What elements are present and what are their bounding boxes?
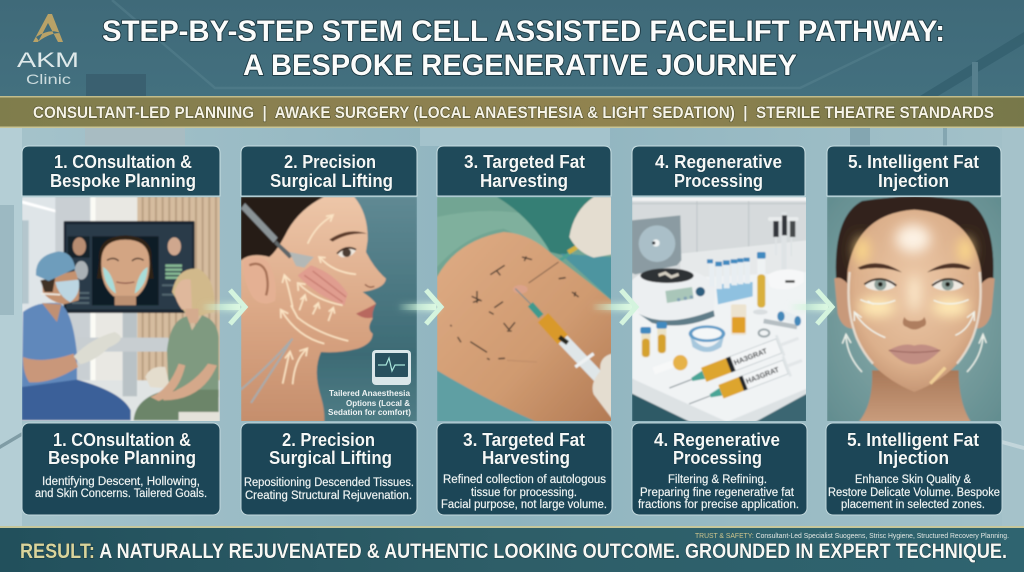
surgeon — [22, 303, 77, 388]
panel 2 text card: Creating Structural Rejuvenation. — [245, 490, 412, 502]
beaker — [731, 304, 746, 335]
panel 5: fat injection — [826, 146, 1002, 515]
features — [858, 263, 971, 272]
panel 4 heading: 4. Regenerative — [655, 151, 782, 172]
panel 3 text card: 3. Targeted Fat — [463, 429, 585, 450]
panel 1 heading: Bespoke Planning — [50, 170, 196, 191]
panel 5 heading — [827, 146, 1001, 196]
title: STEP-BY-STEP STEM CELL ASSISTED FACELIFT PATHWAY: — [102, 15, 945, 48]
panel 5 heading: Injection — [878, 170, 949, 191]
wall monitor — [64, 221, 195, 313]
stand and desk — [123, 313, 137, 396]
panel 4 heading: Processing — [674, 170, 763, 191]
small vial — [654, 364, 674, 371]
logo: AKM Clinic — [17, 14, 79, 87]
panel 2 heading: Surgical Lifting — [270, 170, 393, 191]
panel 1 text card: Identifying Descent, Hollowing, — [42, 476, 200, 488]
panel 1 text card: 1. COnsultation & — [53, 429, 191, 450]
panel 1 heading — [22, 146, 220, 196]
panel 2 heading: 2. Precision — [284, 151, 376, 172]
upper hand — [559, 252, 570, 261]
arrow: step 3 to 4 — [590, 290, 636, 324]
syringes: HA3GRAT — [732, 346, 769, 367]
panel 2 text card: Surgical Lifting — [269, 447, 392, 468]
arrow: step 1 to 2 — [200, 290, 245, 324]
arrow: step 2 to 3 — [396, 290, 441, 324]
panel 2 heading — [241, 146, 417, 196]
panel 3 image: thigh, markings and syringe — [437, 197, 612, 422]
small tubes — [641, 330, 650, 358]
panel 1 text card: Bespoke Planning — [48, 447, 196, 468]
panel 3 heading: 3. Targeted Fat — [464, 151, 585, 172]
panel 4 text card: Filtering & Refining. — [668, 474, 767, 486]
lower hand — [593, 354, 612, 419]
title — [102, 15, 945, 82]
panel 2 text card: 2. Precision — [282, 429, 375, 450]
panel 5 text card: Restore Delicate Volume. Bespoke — [828, 487, 1000, 499]
panel 2 image: face profile with lift arrows — [241, 197, 417, 422]
panel 5 text card: Injection — [878, 447, 949, 468]
patient — [172, 269, 215, 319]
panel 3 text card: Harvesting — [482, 447, 570, 468]
tube rack — [716, 282, 753, 304]
panel 2: surgical lifting — [241, 146, 417, 515]
panel 5 text card: placement in selected zones. — [841, 499, 985, 511]
syringe — [514, 288, 532, 305]
panel 4 image: lab bench with centrifuge and syringes: HA3GRAT — [745, 365, 781, 386]
panel 5 text card: 5. Intelligent Fat — [847, 429, 979, 450]
icon: anaesthesia monitor — [372, 350, 411, 385]
logo: AKM Clinic: Clinic — [26, 71, 71, 87]
panel 3 heading — [437, 146, 611, 196]
panel 1 text card — [22, 423, 220, 515]
panel 3 text card: Refined collection of autologous — [443, 474, 606, 486]
icon: gold A monogram — [33, 14, 63, 42]
panel 3 text card: tissue for processing. — [471, 487, 577, 499]
panel 4 text card — [632, 423, 807, 515]
lift arrows — [842, 300, 986, 372]
panel 4 heading — [632, 146, 805, 196]
panel 4 text card: fractions for precise application. — [638, 499, 799, 511]
gold banner — [0, 96, 1024, 128]
arrow: step 4 to 5 — [788, 290, 832, 324]
panel 1 heading: 1. COnsultation & — [54, 151, 192, 172]
logo: AKM Clinic: AKM — [17, 49, 79, 72]
panel 4 image: lab bench with centrifuge and syringes — [632, 197, 807, 422]
anaesthesia note: Sedation for comfort) — [328, 407, 411, 417]
tall tube — [758, 260, 764, 273]
panel 1 image: surgeon and patient at screen — [22, 197, 220, 422]
title: A BESPOKE REGENERATIVE JOURNEY — [243, 49, 797, 82]
panel 5 image: glowing rejuvenated face — [827, 197, 1002, 422]
panel 3 text card — [437, 423, 612, 515]
glow — [855, 225, 972, 317]
result footer — [0, 526, 1024, 572]
panel 3 heading: Harvesting — [480, 170, 568, 191]
panel 4 text card: Preparing fine regenerative fat — [640, 487, 795, 499]
centrifuge — [632, 215, 681, 274]
panel 4: regenerative processing — [632, 146, 807, 515]
panel 2 text card: Repositioning Descended Tissues. — [244, 477, 414, 489]
panel 4 text card: Processing — [673, 447, 762, 468]
vial and ring — [764, 321, 797, 327]
panel 5 text card: Enhance Skin Quality & — [855, 474, 971, 486]
panel 4 text card: 4. Regenerative — [654, 429, 780, 450]
panel 3: fat harvesting — [437, 146, 612, 515]
panel 5 text card — [826, 423, 1002, 515]
anaesthesia note: Tailered Anaesthesia — [329, 388, 410, 398]
panel 3 text card: Facial purpose, not large volume. — [441, 499, 607, 511]
anaesthesia note — [328, 388, 411, 417]
syringes — [668, 335, 798, 389]
pipette stand — [782, 213, 786, 242]
anaesthesia note: Options (Local & — [346, 398, 410, 408]
panel 5 heading: 5. Intelligent Fat — [848, 151, 979, 172]
header band — [0, 0, 1024, 96]
panel 1: consultation — [22, 146, 220, 515]
dish — [690, 336, 724, 353]
panel 1 text card: and Skin Concerns. Tailered Goals. — [35, 488, 207, 500]
lift arrows — [281, 215, 356, 384]
panel 2 text card — [241, 423, 417, 515]
